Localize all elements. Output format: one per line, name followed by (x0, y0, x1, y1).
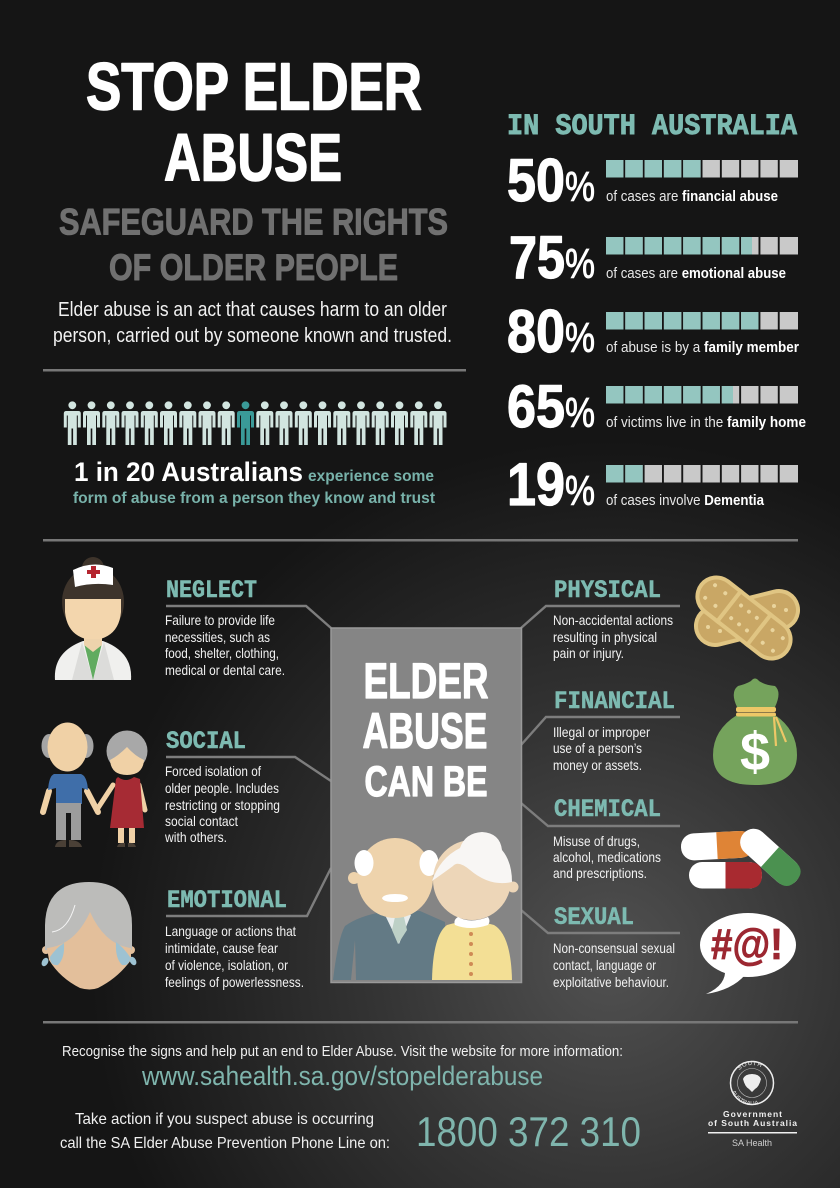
stat: 65%: of victims live in the family home (606, 414, 806, 431)
neglect text: NEGLECT (166, 576, 257, 605)
sexual text: Non-consensual sexual (553, 940, 675, 956)
footer: take action: call the SA Elder Abuse Prevention Phone Line on: (60, 1135, 390, 1152)
neglect text: necessities, such as (165, 629, 270, 645)
intro text (53, 299, 452, 347)
stat: 50%: of cases are financial abuse (606, 188, 778, 205)
financial text: money or assets. (553, 757, 642, 773)
footer: recognise the signs: Recognise the signs and help put an end to Elder Abuse. Visit the website for more information: (62, 1043, 623, 1060)
icon: pills (680, 823, 805, 891)
panel: elder abuse can be (331, 628, 522, 982)
financial text (553, 687, 675, 773)
emotional text: EMOTIONAL (167, 886, 287, 915)
subtitle: OF OLDER PEOPLE (109, 247, 398, 288)
stat: 80%: of abuse is by a family member (606, 339, 799, 356)
emotional text: feelings of powerlessness. (165, 974, 304, 990)
intro text: person, carried out by someone known and trusted. (53, 325, 452, 347)
intro text: Elder abuse is an act that causes harm to an older (58, 299, 447, 321)
chemical text: alcohol, medications (553, 849, 661, 865)
emotional text: intimidate, cause fear (165, 940, 278, 956)
neglect text: food, shelter, clothing, (165, 645, 279, 661)
physical text: pain or injury. (553, 645, 624, 661)
icon: bandages (687, 567, 804, 669)
emotional text: of violence, isolation, or (165, 957, 288, 973)
panel heading: ABUSE (362, 703, 488, 759)
emotional text: Language or actions that (165, 923, 296, 939)
panel heading (362, 653, 488, 806)
stat: 75%: % (565, 240, 595, 287)
heading: in south australia: IN SOUTH AUSTRALIA (507, 110, 797, 144)
sexual text: contact, language or (553, 957, 656, 973)
physical text: resulting in physical (553, 629, 657, 645)
stat: 19%: of cases involve Dementia (606, 492, 765, 509)
chemical text: CHEMICAL (554, 795, 661, 824)
1 in 20 statement: 1 in 20 Australians (74, 457, 303, 487)
financial text: FINANCIAL (554, 687, 675, 716)
illustration: elderly couple (333, 832, 518, 980)
stat: 75%: 75 (509, 224, 565, 291)
footer: phone number: 1800 372 310 (416, 1108, 641, 1155)
sexual text (553, 903, 675, 990)
logo: government of south australia: AUSTRALIA (733, 1091, 758, 1105)
chemical text: Misuse of drugs, (553, 833, 640, 849)
1 in 20 statement: form of abuse from a person they know and trust (73, 490, 436, 507)
financial text: Illegal or improper (553, 724, 650, 740)
stat: 80%: % (565, 314, 595, 361)
subtitle: SAFEGUARD THE RIGHTS (59, 202, 448, 242)
logo: government of south australia (708, 1060, 798, 1148)
sexual text: exploitative behaviour. (553, 974, 669, 990)
emotional text (165, 886, 304, 990)
icon: money bag (713, 678, 797, 785)
social text: with others. (164, 829, 227, 845)
stat: 75%: of cases are emotional abuse (606, 265, 786, 282)
stat: 50%: 50 (507, 147, 565, 214)
stat: 80%: 80 (507, 298, 565, 365)
stat: 65%: % (565, 389, 595, 436)
icon: nurse (55, 557, 131, 680)
stat: 65% (508, 384, 806, 430)
social text: restricting or stopping (165, 797, 280, 813)
title: STOP ELDER (86, 50, 422, 124)
icon: speech bubble: #@! (711, 920, 783, 969)
icon: money bag: $ (740, 722, 770, 782)
neglect text (165, 576, 285, 678)
stat: 19%: 19 (507, 451, 565, 518)
pictogram: 1 in 20 people (64, 401, 447, 445)
physical text (553, 576, 673, 661)
icon: elderly couple holding hands (42, 722, 148, 847)
stat: 65%: 65 (507, 373, 565, 440)
footer: website: www.sahealth.sa.gov/stopelderabuse (141, 1061, 543, 1091)
neglect text: medical or dental care. (165, 662, 285, 678)
stat: 80% (508, 308, 799, 355)
neglect text: Failure to provide life (165, 612, 275, 628)
chemical text (553, 795, 661, 881)
title (86, 50, 422, 196)
panel heading: CAN BE (364, 758, 488, 806)
logo: government of south australia: Government (723, 1109, 782, 1119)
social text: SOCIAL (166, 727, 246, 756)
connector lines (166, 606, 680, 933)
footer: take action (60, 1111, 390, 1152)
financial text: use of a person’s (553, 740, 642, 756)
1 in 20 statement: experience some (308, 468, 434, 485)
social text: Forced isolation of (165, 763, 261, 779)
1 in 20 statement (73, 457, 436, 507)
logo: government of south australia: SA Health (732, 1138, 772, 1148)
physical text: Non-accidental actions (553, 612, 673, 628)
footer: take action: Take action if you suspect abuse is occurring (75, 1111, 374, 1128)
logo: government of south australia: of South Australia (708, 1118, 797, 1128)
stat: 75% (510, 236, 798, 280)
social text: social contact (165, 813, 238, 829)
icon: speech bubble (700, 913, 796, 994)
sexual text: SEXUAL (554, 903, 634, 932)
social text: older people. Includes (165, 780, 279, 796)
subtitle (59, 202, 448, 288)
panel heading: ELDER (364, 653, 488, 709)
stat: 19%: % (565, 467, 595, 514)
chemical text: and prescriptions. (553, 865, 647, 881)
logo: government of south australia: SOUTH (738, 1060, 762, 1070)
stat: 50%: % (565, 163, 595, 210)
social text (164, 727, 280, 845)
stat: 50% (508, 158, 798, 202)
stat: 19% (510, 462, 798, 506)
title: ABUSE (164, 120, 342, 196)
icon: crying woman (40, 882, 138, 990)
physical text: PHYSICAL (554, 576, 661, 605)
